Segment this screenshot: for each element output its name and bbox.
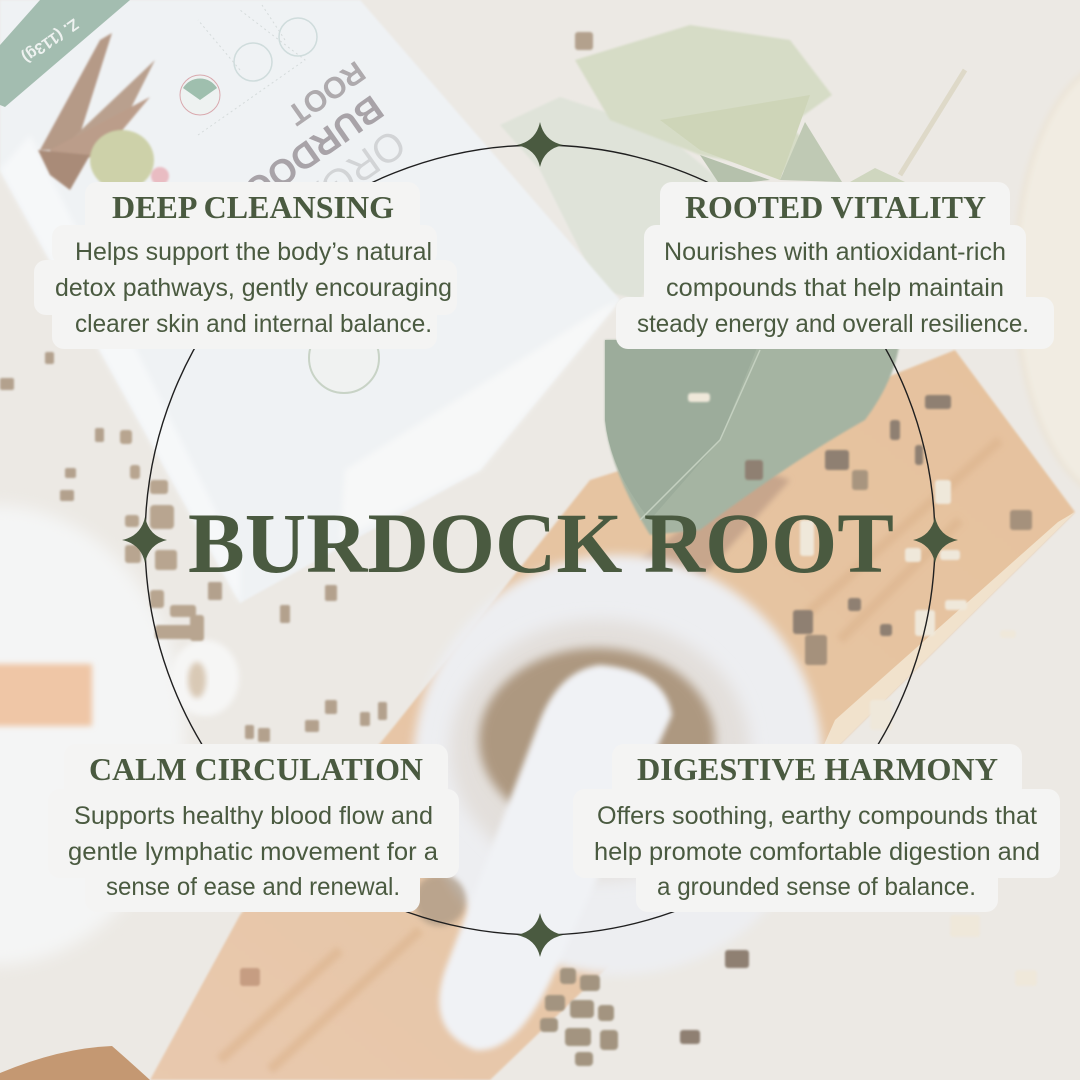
root pile by pestle (414, 874, 466, 926)
description: help promote comfortable digestion and (594, 838, 1040, 866)
description: Nourishes with antioxidant-rich (664, 238, 1006, 266)
label background (48, 744, 459, 912)
pestle (439, 665, 672, 1050)
background photo: burdock ingredients on marble: ORGANIC (235, 121, 413, 264)
wood grain (220, 440, 1000, 1070)
lower root pile (540, 968, 618, 1066)
bag weight label: Z. (113g) (19, 15, 81, 66)
description: compounds that help maintain (666, 274, 1004, 302)
description (637, 238, 1029, 338)
label background (34, 182, 457, 349)
teapot (0, 505, 185, 965)
description (68, 802, 438, 901)
description: steady energy and overall resilience. (637, 310, 1029, 338)
description: detox pathways, gently encouraging (55, 274, 452, 302)
circle outline (145, 145, 935, 935)
heading: CALM CIRCULATION (89, 751, 423, 787)
panel: deep cleansing (34, 182, 457, 349)
description: Supports healthy blood flow and (74, 802, 433, 830)
star ornament: right (913, 517, 958, 563)
bag logo (309, 323, 379, 393)
star ornament: top (517, 122, 563, 167)
panel: rooted vitality (616, 182, 1054, 349)
bottom-left root (0, 1046, 150, 1080)
description (594, 802, 1040, 901)
heading: DEEP CLEANSING (112, 189, 394, 225)
cutting board (150, 350, 1075, 1080)
bag green band (0, 0, 130, 107)
background photo: burdock ingredients on marble: BURDOCK (217, 87, 391, 227)
description: gentle lymphatic movement for a (68, 838, 438, 866)
left root chips pile (120, 430, 204, 641)
label background (616, 182, 1054, 349)
leaf: upper left pale (500, 97, 720, 300)
stem (900, 70, 965, 175)
mortar (413, 555, 823, 975)
title: BURDOCK ROOT (188, 495, 894, 591)
leaf: lower dark (605, 340, 900, 535)
dark shade on board (640, 470, 790, 580)
description: Offers soothing, earthy compounds that (597, 802, 1037, 830)
star ornament: bottom (517, 913, 563, 957)
bag illustration (38, 33, 169, 190)
description: a grounded sense of balance. (657, 873, 976, 901)
panel: calm circulation (48, 744, 459, 912)
heading: DIGESTIVE HARMONY (637, 751, 998, 787)
star ornament: left (122, 517, 167, 563)
heading: ROOTED VITALITY (685, 189, 986, 225)
description: clearer skin and internal balance. (75, 310, 432, 338)
description: sense of ease and renewal. (106, 873, 400, 901)
bag (0, 0, 620, 603)
description (55, 238, 452, 338)
panel: digestive harmony (573, 744, 1060, 912)
bag badges (180, 5, 317, 135)
bag printed name: ROOT (281, 54, 371, 131)
leaf: upper (575, 25, 840, 182)
label background (573, 744, 1060, 912)
scattered root chips (0, 32, 593, 742)
description: Helps support the body’s natural (75, 238, 432, 266)
right bowl (1015, 60, 1080, 500)
